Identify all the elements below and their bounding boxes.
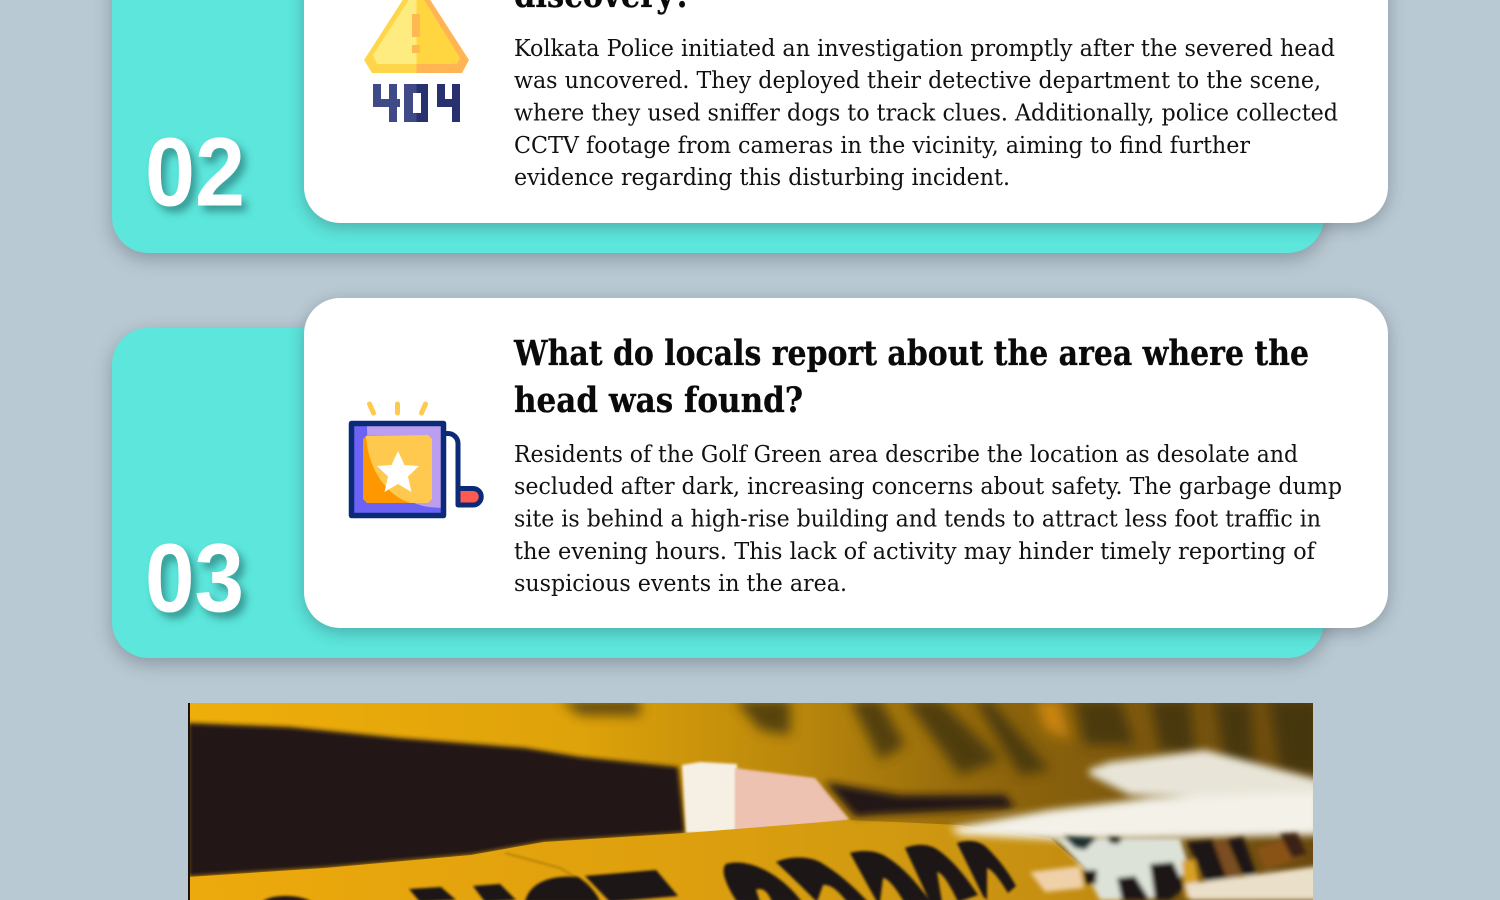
text block: question 03 answer: site is behind a high-rise building and tends to attract less foot traffic in	[514, 506, 1321, 532]
text block: question 02 answer: where they used sniffer dogs to track clues. Additionally, police collected	[514, 100, 1338, 126]
heading: question 03	[513, 333, 1309, 421]
panel: question 03 teal backing	[112, 328, 1324, 658]
text block: question 02 answer: CCTV footage from cameras in the vicinity, aiming to find further	[514, 133, 1250, 159]
text block: question 02 answer	[514, 36, 1338, 191]
text block: question 03 answer: suspicious events in the area.	[514, 571, 847, 597]
number 03: 03	[145, 524, 244, 632]
icon: jack-in-the-box with star	[352, 404, 481, 516]
text block: question 02 answer: Kolkata Police initiated an investigation promptly after the severed head	[514, 36, 1335, 62]
icon: warning triangle with 404	[364, 0, 469, 122]
text block: question 03 answer: Residents of the Golf Green area describe the location as desolate and	[514, 442, 1298, 468]
heading: question 03: head was found?	[514, 380, 803, 421]
heading: question 03: What do locals report about the area where the	[513, 333, 1309, 374]
text block: question 03 answer	[514, 442, 1342, 597]
text block: question 02 answer: was uncovered. They deployed their detective department to the scene,	[514, 68, 1321, 94]
photo: police caution tape	[188, 700, 1320, 900]
panel: question 02 teal backing	[112, 0, 1324, 253]
lettering on tape	[262, 841, 1016, 900]
panel: question 02 white card	[304, 0, 1388, 223]
text block: question 03 answer: the evening hours. This lack of activity may hinder timely reporting of	[514, 539, 1316, 565]
tape noise: right	[1030, 833, 1320, 900]
text block: question 03 answer: secluded after dark, increasing concerns about safety. The garbage dump	[514, 474, 1342, 500]
number 02: 02	[145, 118, 245, 226]
text block: question 02 answer: evidence regarding this disturbing incident.	[514, 165, 1010, 191]
panel: question 03 white card	[304, 298, 1388, 628]
